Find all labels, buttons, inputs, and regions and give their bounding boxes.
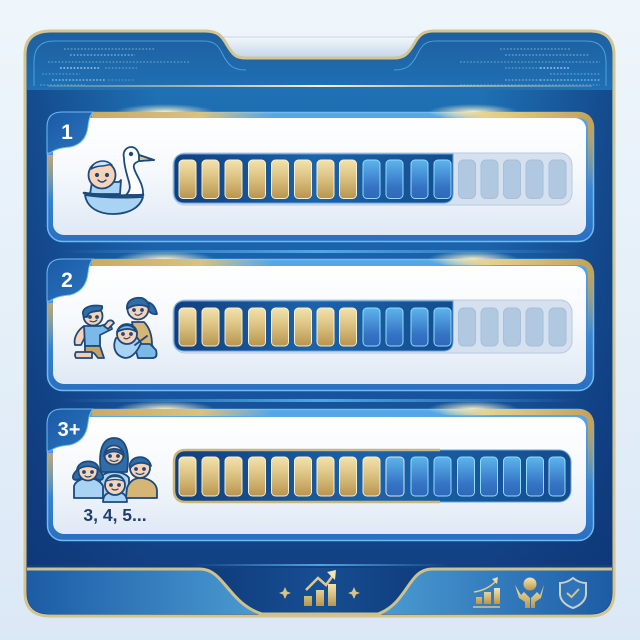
progress bar xyxy=(173,153,572,205)
number tab xyxy=(47,259,93,301)
progress bar xyxy=(173,300,572,353)
card body xyxy=(53,118,586,235)
card border xyxy=(48,410,594,540)
card gold accents xyxy=(48,251,594,348)
frame inner highlight xyxy=(34,41,606,86)
card border xyxy=(48,260,594,390)
number: 1 xyxy=(61,121,73,144)
icon: shield check xyxy=(560,578,586,608)
icon: growth chart xyxy=(304,570,336,606)
light streaks xyxy=(60,250,580,566)
icon: small growth chart xyxy=(473,577,500,607)
panel: row 1 xyxy=(47,104,594,242)
number: 2 xyxy=(61,269,73,292)
card body xyxy=(53,417,586,534)
number: 3+ xyxy=(58,419,80,441)
progress bar xyxy=(174,450,571,502)
panel: row 2 xyxy=(47,251,594,390)
card gold accents xyxy=(48,104,594,200)
dot pattern left xyxy=(40,49,190,85)
icon: sparkle right xyxy=(348,587,360,599)
children count label: 3, 4, 5... xyxy=(83,505,147,525)
icon: family group xyxy=(73,438,157,502)
number tab xyxy=(47,409,93,451)
card gold accents xyxy=(48,401,594,498)
notch panel xyxy=(215,37,425,61)
footer centre panel xyxy=(205,568,432,614)
number tab xyxy=(47,112,93,153)
panel: row 3 xyxy=(47,401,594,540)
gold divider xyxy=(48,85,592,87)
frame side shading xyxy=(27,90,612,565)
icon: baby in stork boat xyxy=(84,147,154,214)
card body xyxy=(53,266,586,384)
footer xyxy=(27,568,612,614)
footer right panel xyxy=(380,569,612,614)
card border xyxy=(48,112,594,242)
icon: two children with mother xyxy=(75,298,157,358)
icon: caring hands xyxy=(515,578,544,608)
footer left panel xyxy=(27,569,262,614)
icon: sparkle left xyxy=(279,587,291,599)
dot pattern right xyxy=(460,49,600,85)
footer gold outline xyxy=(27,569,612,614)
